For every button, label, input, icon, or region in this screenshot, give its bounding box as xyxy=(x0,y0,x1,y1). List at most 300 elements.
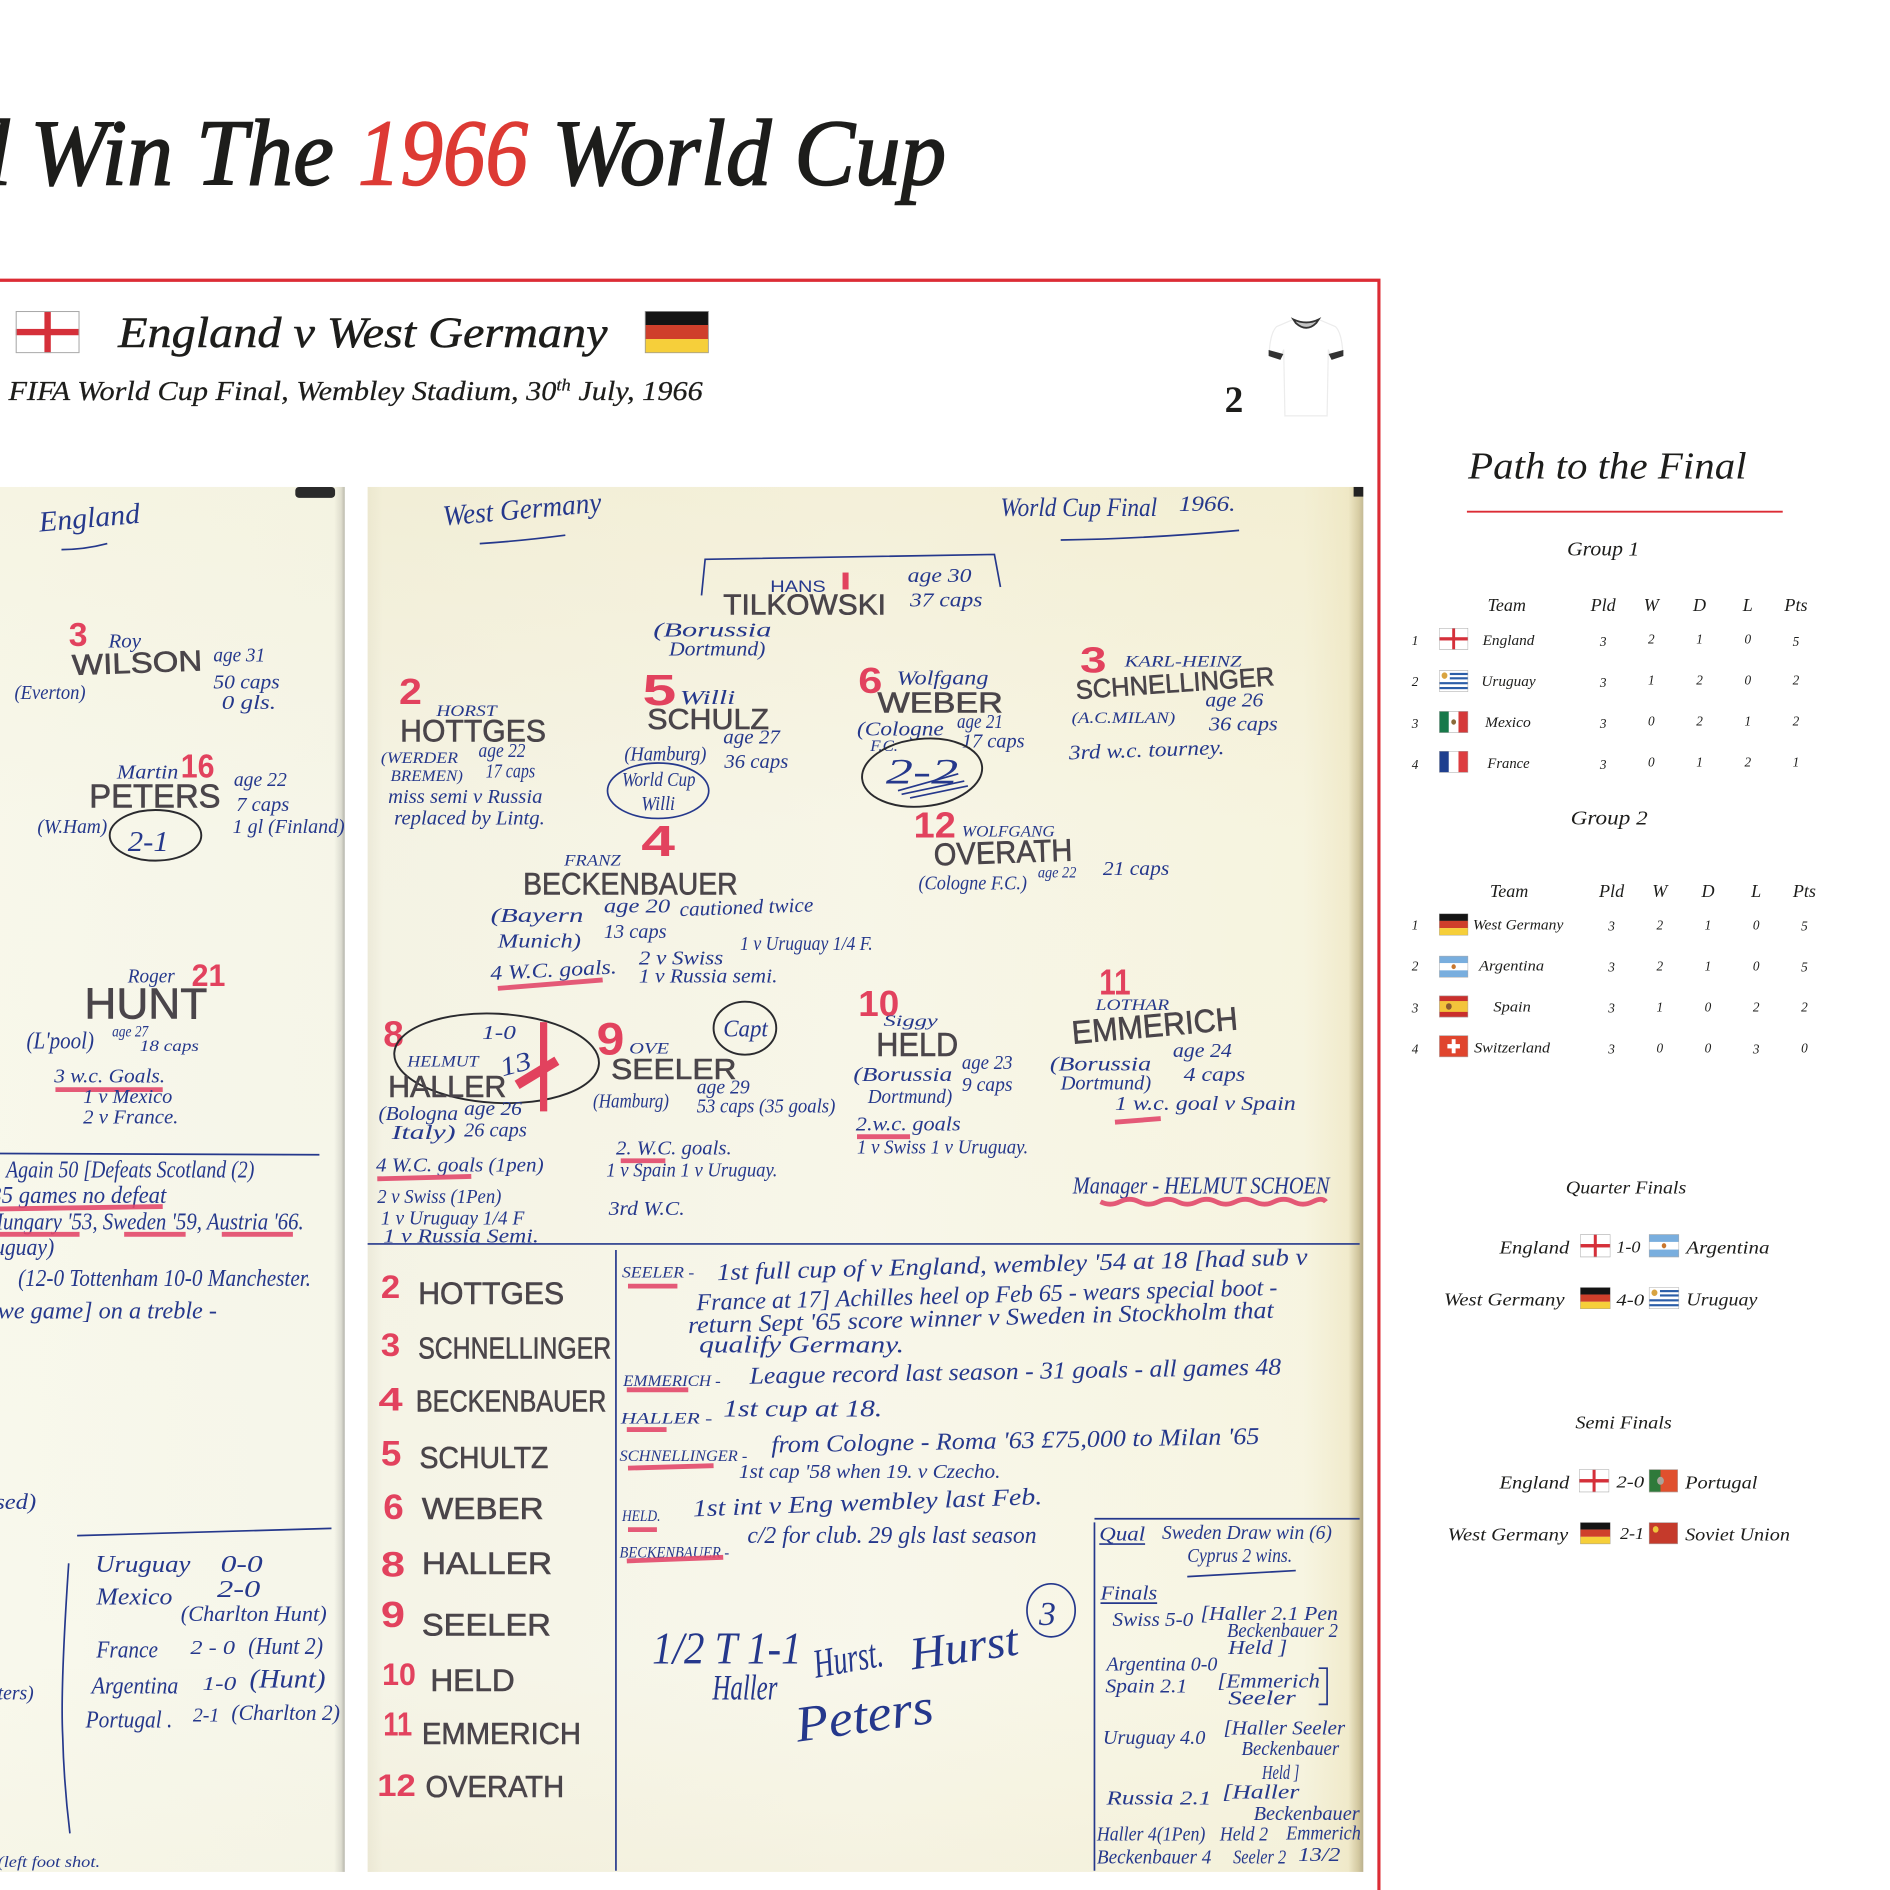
player: Beckenbauer: cautioned twice xyxy=(679,894,814,921)
player: Seeler: 1 v Spain 1 v Uruguay. xyxy=(606,1159,777,1181)
group 1 table: 1 xyxy=(1696,632,1703,647)
qualifying and finals results box: Held 2 xyxy=(1219,1824,1268,1846)
player: Peters: Martin xyxy=(116,762,178,784)
title: Win The xyxy=(30,101,334,205)
player: Tilkowski xyxy=(653,554,1000,661)
group 1 table: 3 xyxy=(1599,716,1607,731)
player: Peters: PETERS xyxy=(89,778,221,816)
group 2 table: Switzerland xyxy=(1474,1040,1551,1056)
qualifying and finals results box: Held ] xyxy=(1261,1762,1299,1784)
player: Seeler: 3rd W.C. xyxy=(608,1198,685,1220)
player: Beckenbauer: Munich) xyxy=(497,930,581,952)
player notes: from Cologne - Roma '63 £75,000 to Milan '65 xyxy=(771,1424,1260,1458)
player: Schnellinger xyxy=(1067,640,1278,764)
group 1 table: Team xyxy=(1487,595,1526,615)
semi finals: 2-0 xyxy=(1616,1472,1645,1491)
team list: SCHNELLINGER xyxy=(418,1332,611,1365)
results: England finals: (Charlton Hunt) xyxy=(181,1602,327,1626)
player: Overath xyxy=(914,805,1169,895)
group 2 table: 2 xyxy=(1753,999,1760,1014)
half time note: Haller xyxy=(712,1668,778,1708)
half time note: 1/2 T 1-1 xyxy=(652,1622,802,1673)
player: Schulz: SCHULZ xyxy=(647,704,769,736)
group 2 table: 1 xyxy=(1705,917,1711,932)
notes: England record xyxy=(0,1158,311,1871)
page heading: England: England xyxy=(37,498,142,539)
player: Overath: WOLFGANG xyxy=(962,824,1055,841)
player: Peters: (W.Ham) xyxy=(37,816,107,838)
player: Seeler: 9 xyxy=(597,1014,624,1065)
team list: BECKENBAUER xyxy=(416,1385,606,1418)
qualifying and finals results box: Uruguay 4.0 xyxy=(1103,1727,1205,1749)
player: Emmerich: EMMERICH xyxy=(1070,1000,1239,1051)
group 2 table: 0 xyxy=(1753,958,1760,973)
team list: SCHULTZ xyxy=(419,1442,548,1475)
group 2 table: 2 xyxy=(1412,958,1419,973)
group 1 table: 0 xyxy=(1648,714,1655,729)
team list: 12 xyxy=(377,1768,416,1803)
quarter finals: Argentina xyxy=(1685,1238,1769,1258)
group 1 table: Mexico xyxy=(1484,715,1531,731)
player: Seeler: 53 caps (35 goals) xyxy=(697,1096,835,1118)
player: Seeler: Capt xyxy=(723,1017,769,1043)
panel: England notes page xyxy=(0,487,345,1872)
group 2 table: W xyxy=(1652,881,1669,901)
group 2 table: 0 xyxy=(1801,1040,1808,1055)
player: Hunt: Roger xyxy=(127,965,176,987)
group 1 table: 2 xyxy=(1744,755,1751,770)
player: Schulz: (Hamburg) xyxy=(624,744,706,766)
group 1 table: 1 xyxy=(1744,714,1751,729)
player: Beckenbauer: 4 W.C. goals. xyxy=(490,956,617,985)
results: England finals: France xyxy=(96,1637,158,1663)
player: Weber: age 21 xyxy=(957,711,1003,733)
semi finals: Semi Finals xyxy=(1575,1412,1672,1432)
player: Schnellinger: KARL-HEINZ xyxy=(1123,654,1242,671)
half time note: Hurst xyxy=(906,1614,1023,1679)
notes: England record: (left foot shot. xyxy=(0,1854,100,1871)
group 2 table: 1 xyxy=(1412,917,1418,932)
group 2 table: 2 xyxy=(1656,917,1663,932)
quarter finals: West Germany xyxy=(1444,1289,1566,1309)
player: Schnellinger: age 26 xyxy=(1205,689,1264,711)
qualifying and finals results box: Beckenbauer xyxy=(1242,1738,1340,1760)
player: Haller: 26 caps xyxy=(464,1120,527,1142)
title: World Cup xyxy=(552,101,946,205)
player: Wilson: WILSON xyxy=(71,645,203,682)
semi finals: Portugal xyxy=(1684,1473,1757,1493)
group 2 table: Group 2 xyxy=(1571,807,1648,829)
player: Schnellinger: 36 caps xyxy=(1208,713,1278,735)
player: Hottges: HOTTGES xyxy=(400,713,546,748)
qualifying and finals results box: Emmerich xyxy=(1285,1822,1361,1844)
player: Hottges: age 22 xyxy=(479,740,526,762)
group 2 table: 0 xyxy=(1705,1040,1712,1055)
title xyxy=(0,101,946,205)
player: Schnellinger: SCHNELLINGER xyxy=(1075,661,1275,705)
player: Haller: HELMUT xyxy=(406,1054,480,1071)
group 2 table: Pld xyxy=(1598,881,1625,901)
group 1 table: 2 xyxy=(1696,714,1703,729)
player: Haller: HALLER xyxy=(388,1071,506,1104)
group 2 table: 1 xyxy=(1705,958,1711,973)
player: Haller xyxy=(376,1008,601,1248)
panel: match frame xyxy=(0,280,1379,1890)
match subtitle: th xyxy=(556,376,571,395)
results: England finals: Uruguay xyxy=(95,1552,191,1578)
player: Beckenbauer: 4 xyxy=(641,818,675,866)
player: Wilson: 0 gls. xyxy=(222,692,276,714)
player: Hottges: BREMEN) xyxy=(391,768,463,785)
player: Schulz: World Cup xyxy=(622,769,695,791)
qualifying and finals results box: [Emmerich xyxy=(1217,1671,1320,1693)
group 1 table: 1 xyxy=(1648,673,1655,688)
semi finals: 2-1 xyxy=(1620,1524,1644,1543)
group 1 table: Group 1 xyxy=(1567,539,1639,561)
player: Weber: Wolfgang xyxy=(897,668,988,690)
group 2 table: West Germany xyxy=(1473,917,1564,933)
player: Held xyxy=(853,983,1028,1159)
player notes: SCHNELLINGER - xyxy=(620,1448,747,1465)
group 1 table: 2 xyxy=(1793,673,1800,688)
icon: West Germany flag xyxy=(645,311,709,353)
team list: 2 xyxy=(381,1269,400,1305)
player: Emmerich: age 24 xyxy=(1173,1040,1232,1062)
player: Seeler: OVE xyxy=(629,1040,670,1057)
player: Held: 10 xyxy=(858,983,899,1024)
group 2 table: 2 xyxy=(1801,999,1808,1014)
group 1 table: 2 xyxy=(1793,714,1800,729)
player: Schulz: age 27 xyxy=(723,727,781,749)
team list: 5 xyxy=(381,1435,401,1474)
group 1 table: France xyxy=(1486,756,1530,772)
qualifying and finals results box: Swiss 5-0 xyxy=(1113,1609,1193,1631)
player: Peters xyxy=(37,747,345,861)
player: Beckenbauer: BECKENBAUER xyxy=(523,866,738,901)
player: Held: Siggy xyxy=(884,1013,938,1030)
qualifying and finals results box: Haller 4(1Pen) xyxy=(1096,1824,1206,1846)
player: Hottges: HORST xyxy=(435,703,498,720)
qualifying and finals results box: Seeler 2 xyxy=(1233,1846,1286,1868)
match subtitle: July, 1966 xyxy=(571,375,703,406)
group 1 table: 0 xyxy=(1744,632,1751,647)
player: Overath: (Cologne F.C.) xyxy=(918,873,1027,895)
group 2 table: 3 xyxy=(1607,919,1615,934)
player: Haller: 4 W.C. goals (1pen) xyxy=(376,1155,544,1177)
player notes: SEELER - xyxy=(622,1265,694,1282)
player: Wilson: Roy xyxy=(107,630,142,652)
player: Tilkowski: age 30 xyxy=(908,565,972,587)
qualifying and finals results box: 13/2 xyxy=(1298,1844,1340,1866)
player: Emmerich: LOTHAR xyxy=(1094,997,1170,1014)
qualifying and finals results box: Spain 2.1 xyxy=(1105,1675,1187,1697)
manager note: Manager - HELMUT SCHOEN xyxy=(1072,1173,1331,1199)
match heading: England v West Germany xyxy=(117,309,608,357)
qualifying and finals results box: Sweden Draw win (6) xyxy=(1162,1522,1332,1544)
player notes: 1st cup at 18. xyxy=(723,1396,882,1422)
player: Hunt xyxy=(27,958,225,1128)
group 2 table: Pts xyxy=(1792,881,1816,901)
panel: path to the final xyxy=(1411,446,1816,1544)
player: Schulz xyxy=(608,667,788,818)
player: Held: 2.w.c. goals xyxy=(856,1114,961,1136)
player: Haller: age 26 xyxy=(464,1098,523,1120)
group 2 table xyxy=(1411,807,1816,1057)
player: Haller: 1 v Uruguay 1/4 F xyxy=(381,1208,525,1230)
player: Weber: WEBER xyxy=(878,687,1003,719)
quarter finals: England xyxy=(1498,1238,1570,1258)
player: Held: HELD xyxy=(876,1026,958,1064)
player notes: HALLER - xyxy=(619,1411,712,1428)
player: Schulz: Willi xyxy=(680,687,736,709)
player: Hottges: replaced by Lintg. xyxy=(394,807,545,829)
group 1 table: 1 xyxy=(1793,755,1799,770)
player: Held: (Borussia xyxy=(853,1064,952,1086)
group 1 table: D xyxy=(1692,595,1706,615)
player notes: qualify Germany. xyxy=(699,1332,904,1358)
team list: 3 xyxy=(381,1327,400,1363)
group 2 table: 0 xyxy=(1656,1040,1663,1055)
notes: England record: Again 50 [Defeats Scotland (2) xyxy=(4,1158,254,1184)
player: Hottges xyxy=(381,671,546,829)
qualifying and finals results box: Held ] xyxy=(1227,1637,1287,1659)
notes: England record: we game] on a treble - xyxy=(0,1299,217,1325)
team list: WEBER xyxy=(422,1493,544,1526)
player: Beckenbauer: 13 caps xyxy=(604,921,667,943)
player: Overath: 12 xyxy=(914,805,956,846)
group 1 table: 4 xyxy=(1412,757,1419,772)
player: Wilson: age 31 xyxy=(213,645,265,667)
player: Haller: 8 xyxy=(383,1013,404,1054)
page heading: World Cup Final 1966 xyxy=(1000,492,1239,540)
player: Peters: 1 gl (Finland) xyxy=(233,816,345,838)
player: Peters: 16 xyxy=(181,747,215,785)
player: Schulz: Willi xyxy=(641,793,675,815)
player: Hottges: (WERDER xyxy=(381,750,459,767)
group 1 table: 2 xyxy=(1412,674,1419,689)
notes: England record: (12-0 Tottenham 10-0 Manchester. xyxy=(18,1266,311,1292)
team list: HOTTGES xyxy=(418,1276,564,1311)
team list: 4 xyxy=(378,1381,403,1417)
player: Weber: 17 caps xyxy=(962,730,1025,752)
team list: 10 xyxy=(382,1657,416,1692)
half time note: Hurst. xyxy=(809,1629,886,1687)
match subtitle: FIFA World Cup Final, Wembley Stadium, 30 xyxy=(8,375,510,406)
player: Overath: age 22 xyxy=(1038,865,1077,882)
qualifying and finals results box: Finals xyxy=(1099,1583,1157,1605)
player: Schnellinger: 3 xyxy=(1080,640,1107,681)
team list xyxy=(377,1269,611,1804)
player: Peters: age 22 xyxy=(234,769,287,791)
player: Hottges: 2 xyxy=(399,671,422,712)
group 2 table: L xyxy=(1750,881,1761,901)
qualifying and finals results box: Beckenbauer 4 xyxy=(1097,1846,1211,1868)
quarter finals: 4-0 xyxy=(1616,1290,1645,1309)
player: Hunt: age 27 xyxy=(112,1024,149,1041)
group 2 table: 2 xyxy=(1656,958,1663,973)
icon: shirt xyxy=(1269,319,1343,416)
player: Hunt: HUNT xyxy=(84,981,207,1029)
player: Beckenbauer: 2 v Swiss xyxy=(639,947,723,969)
group 1 table: L xyxy=(1742,595,1753,615)
half time note: 3 xyxy=(1038,1596,1056,1633)
player: Hunt: 1 v Mexico xyxy=(83,1086,172,1108)
player: Beckenbauer: FRANZ xyxy=(563,852,621,869)
player: Wilson xyxy=(14,616,280,714)
semi finals: West Germany xyxy=(1448,1524,1569,1544)
player notes: 1st int v Eng wembley last Feb. xyxy=(692,1484,1043,1522)
group 1 table: 1 xyxy=(1696,755,1703,770)
player: Beckenbauer: 1 v Russia semi. xyxy=(639,965,777,987)
results: England finals: (Hunt 2) xyxy=(248,1634,323,1660)
qualifying and finals results box: [Haller 2.1 Pen xyxy=(1201,1603,1338,1625)
group 1 table: 0 xyxy=(1648,755,1655,770)
player: Weber: 6 xyxy=(858,660,882,701)
semi finals: Soviet Union xyxy=(1685,1524,1790,1544)
group 1 table: 3 xyxy=(1599,757,1607,772)
player: Overath: 21 caps xyxy=(1103,858,1169,880)
player: Tilkowski: TILKOWSKI xyxy=(723,590,886,622)
player: Seeler: SEELER xyxy=(611,1054,736,1086)
group 2 table: 3 xyxy=(1607,1001,1615,1016)
player: Peters: 2-1 xyxy=(128,826,169,858)
results: England finals: (Hunt) xyxy=(250,1664,326,1694)
group 1 table: 1 xyxy=(1412,633,1418,648)
player: Tilkowski: 37 caps xyxy=(909,589,982,611)
player: Hunt: 3 w.c. Goals. xyxy=(53,1065,165,1087)
group 1 table: 3 xyxy=(1599,675,1607,690)
group 2 table: 5 xyxy=(1801,960,1808,975)
player notes: 1st cap '58 when 19. v Czecho. xyxy=(739,1461,1000,1483)
group 2 table: 3 xyxy=(1752,1041,1760,1056)
player: Peters: 7 caps xyxy=(236,794,289,816)
player: Haller: (Bologna xyxy=(378,1103,458,1125)
semi finals xyxy=(1448,1412,1790,1544)
group 1 table: 3 xyxy=(1411,716,1419,731)
title: 1966 xyxy=(358,101,528,205)
player: Seeler xyxy=(593,1002,835,1220)
player: Schnellinger: 3rd w.c. tourney. xyxy=(1067,737,1225,764)
player: Emmerich: (Borussia xyxy=(1050,1053,1151,1075)
results: England finals: Argentina xyxy=(90,1674,178,1700)
group 1 table xyxy=(1411,539,1808,773)
page heading: World Cup Final 1966: World Cup Final xyxy=(1000,492,1157,522)
group 1 table: 0 xyxy=(1744,673,1751,688)
player notes: HELD. xyxy=(621,1508,661,1525)
qualifying and finals results box: Cyprus 2 wins. xyxy=(1187,1545,1292,1567)
player: Hunt: (L'pool) xyxy=(27,1029,94,1055)
player notes: BECKENBAUER - xyxy=(620,1544,729,1561)
group 1 table: Pld xyxy=(1590,595,1617,615)
qualifying and finals results box: Beckenbauer 2 xyxy=(1227,1620,1338,1642)
results: England finals: 2-0 xyxy=(217,1577,260,1603)
player: Seeler: age 29 xyxy=(697,1076,750,1098)
player: Seeler: (Hamburg) xyxy=(593,1091,669,1113)
group 2 table: 0 xyxy=(1753,917,1760,932)
player: Held: 9 caps xyxy=(962,1074,1013,1096)
results: England finals xyxy=(62,1528,340,1833)
player: Wilson: 50 caps xyxy=(213,671,280,693)
player: Emmerich: Dortmund) xyxy=(1060,1073,1151,1095)
group 2 table: 1 xyxy=(1656,999,1663,1014)
group 1 table: W xyxy=(1644,595,1661,615)
player: Wilson: (Everton) xyxy=(14,682,86,704)
group 1 table: England xyxy=(1482,633,1535,649)
team list: 11 xyxy=(383,1706,412,1744)
group 2 table: 3 xyxy=(1607,1041,1615,1056)
player notes xyxy=(619,1245,1308,1561)
shirt number: 2 xyxy=(1225,380,1243,421)
quarter finals: 1-0 xyxy=(1616,1237,1641,1256)
team list: HELD xyxy=(430,1663,515,1698)
team list: 9 xyxy=(381,1594,405,1635)
panel heading: Path to the Final xyxy=(1467,446,1747,488)
player: Weber xyxy=(857,660,1025,812)
player: Held: Dortmund) xyxy=(867,1086,952,1108)
quarter finals: Uruguay xyxy=(1686,1289,1758,1309)
group 1 table: Uruguay xyxy=(1481,674,1536,690)
player: Haller: 1-0 xyxy=(482,1022,516,1044)
group 2 table: Spain xyxy=(1493,999,1531,1015)
half time note xyxy=(652,1584,1075,1753)
player: Weber: 2-2 xyxy=(886,751,958,791)
player notes: c/2 for club. 29 gls last season xyxy=(747,1523,1037,1549)
team list: EMMERICH xyxy=(422,1718,581,1751)
player notes: return Sept '65 score winner v Sweden in Stockholm that xyxy=(688,1298,1275,1339)
group 1 table: 5 xyxy=(1793,634,1800,649)
player: Haller: 1 v Russia Semi. xyxy=(383,1226,539,1248)
qualifying and finals results box: Qual xyxy=(1099,1523,1145,1545)
icon: England flag xyxy=(16,311,80,353)
player notes: EMMERICH - xyxy=(622,1373,721,1390)
player: Weber: (Cologne xyxy=(857,718,944,740)
qualifying and finals results box: [Haller xyxy=(1222,1781,1301,1803)
results: England finals: (Charlton 2) xyxy=(231,1701,340,1725)
qualifying and finals results box xyxy=(1096,1522,1361,1868)
player: Emmerich xyxy=(1050,961,1296,1122)
group 2 table: 0 xyxy=(1705,999,1712,1014)
player: Held: 1 v Swiss 1 v Uruguay. xyxy=(857,1137,1028,1159)
player: Tilkowski: (Borussia xyxy=(653,619,771,641)
half time note: Peters xyxy=(791,1678,937,1753)
qualifying and finals results box: [Haller Seeler xyxy=(1223,1718,1346,1740)
player notes: 1st full cup of v England, wembley '54 at 18 [had sub v xyxy=(717,1245,1308,1286)
panel: match header xyxy=(7,309,1343,421)
team list: SEELER xyxy=(422,1608,551,1643)
player: Beckenbauer: 1 v Uruguay 1/4 F. xyxy=(740,933,873,955)
page heading: World Cup Final 1966: 1966. xyxy=(1179,492,1235,516)
semi finals: England xyxy=(1498,1473,1570,1493)
qualifying and finals results box: Argentina 0-0 xyxy=(1105,1654,1217,1676)
group 2 table: 4 xyxy=(1412,1041,1419,1056)
player: Emmerich: 11 xyxy=(1099,961,1131,1002)
group 1 table: 3 xyxy=(1599,634,1607,649)
team list: OVERATH xyxy=(425,1771,564,1804)
qualifying and finals results box: Seeler xyxy=(1228,1687,1297,1709)
qualifying and finals results box: Russia 2.1 xyxy=(1105,1787,1211,1809)
player: Beckenbauer: (Bayern xyxy=(491,905,583,927)
group 2 table: D xyxy=(1700,881,1715,901)
qualifying and finals results box: Beckenbauer xyxy=(1254,1803,1361,1825)
player: Emmerich: 1 w.c. goal v Spain xyxy=(1115,1093,1296,1115)
quarter finals xyxy=(1444,1177,1769,1309)
player: Schulz: 36 caps xyxy=(723,751,788,773)
player: Hottges: miss semi v Russia xyxy=(388,786,542,808)
player: Tilkowski: Dortmund) xyxy=(668,639,766,661)
player notes: League record last season - 31 goals - all games 48 xyxy=(748,1354,1281,1390)
group 2 table: Team xyxy=(1490,881,1528,901)
player: Schnellinger: (A.C.MILAN) xyxy=(1072,710,1175,727)
